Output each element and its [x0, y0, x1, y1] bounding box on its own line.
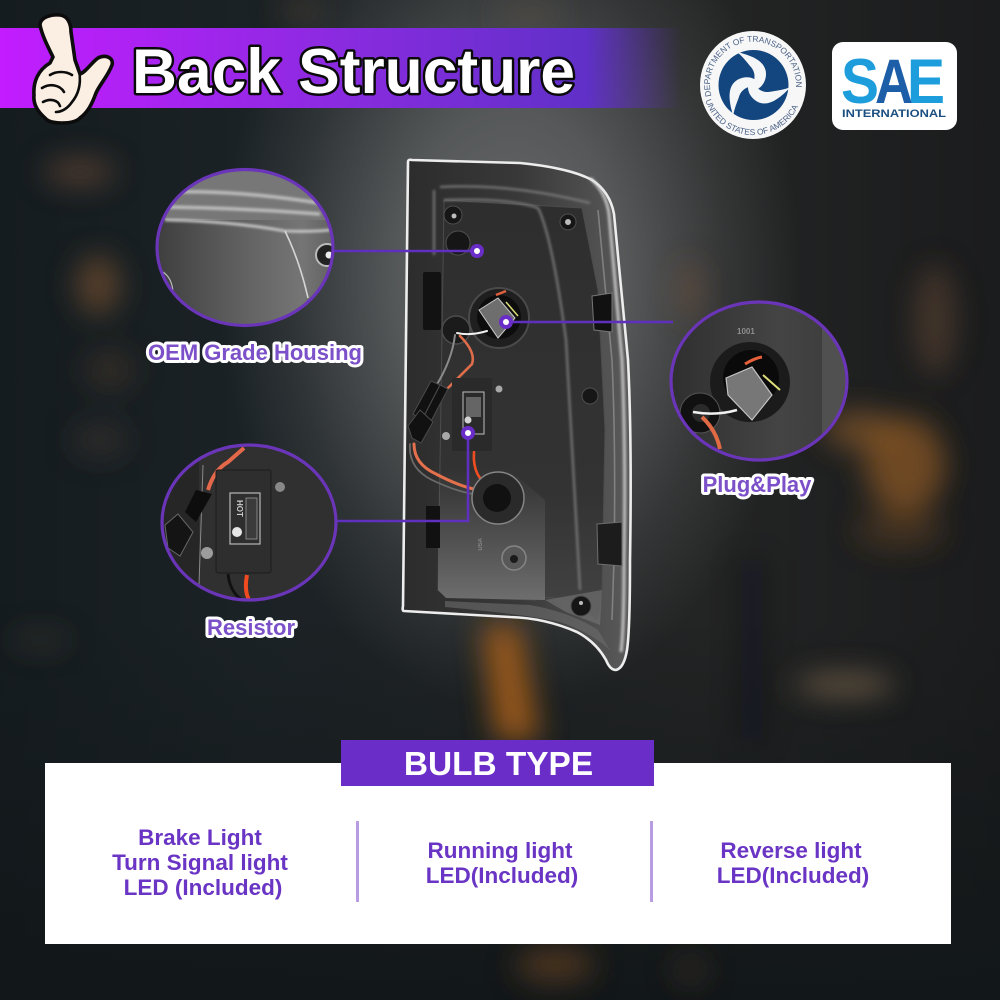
column 3: reverse: Reverse light	[720, 838, 862, 863]
column 1: brake and turn: Turn Signal light	[112, 850, 288, 875]
label: Resistor: Resistor	[207, 615, 295, 640]
divider left	[356, 821, 359, 902]
logo: SAE International: INTERNATIONAL	[842, 108, 946, 120]
logo: US Department of Transportation seal	[700, 31, 806, 139]
column 3: reverse: LED(Included)	[717, 863, 869, 888]
wires lower	[410, 444, 492, 495]
resistor box	[452, 378, 492, 451]
callout: housing detail circle	[150, 165, 340, 330]
lamp ridge highlights	[434, 186, 590, 590]
column 2: running: LED(Included)	[426, 863, 578, 888]
tail light back view	[403, 160, 631, 670]
logo: SAE International: S	[841, 47, 879, 117]
title: Back Structure	[132, 37, 575, 107]
logo: SAE International: A	[875, 47, 913, 117]
lamp inner housing	[438, 200, 605, 620]
bulb socket	[469, 288, 529, 348]
lower left slot	[426, 506, 440, 548]
label: Plug&Play: Plug&Play	[703, 472, 812, 497]
right clip slot top	[592, 293, 612, 332]
lower socket	[472, 472, 524, 524]
screw heads	[452, 214, 583, 605]
bolt corner triangle	[545, 590, 602, 625]
lamp right rim	[590, 178, 625, 652]
heading tab	[341, 740, 654, 786]
connector	[408, 381, 448, 443]
callout: plug detail circle	[665, 295, 855, 465]
column 2: running: Running light	[428, 838, 573, 863]
small wire grommet	[442, 316, 470, 344]
lower round boss	[502, 546, 526, 570]
left clip slot	[423, 272, 441, 330]
panel: bulb type	[45, 740, 951, 944]
label: OEM Grade Housing: OEM Grade Housing	[148, 340, 362, 365]
right clip slot bottom	[597, 522, 622, 566]
leader lines	[333, 251, 673, 521]
divider right	[650, 821, 653, 902]
logo: SAE International: E	[907, 47, 945, 117]
lamp inner bezel	[598, 210, 615, 620]
lower lighter shelf	[438, 470, 545, 600]
lamp outer shell	[403, 160, 631, 670]
banner: header band	[0, 28, 682, 108]
logo: SAE International	[832, 42, 957, 130]
bottom curve band	[445, 601, 610, 650]
column 1: brake and turn: Brake Light	[138, 825, 262, 850]
marker dots	[461, 244, 513, 440]
heading: BULB TYPE: BULB TYPE	[404, 746, 593, 783]
callout: resistor detail circle	[155, 440, 345, 605]
wires upper	[436, 331, 487, 388]
screw bosses	[444, 206, 598, 616]
icon: pointing hand	[34, 15, 112, 123]
moulded lettering: USA	[478, 537, 484, 551]
column 1: brake and turn: LED (Included)	[124, 875, 282, 900]
callout: resistor detail circle: HOT	[235, 500, 244, 517]
callout: plug detail circle: 1001	[737, 327, 755, 336]
panel background	[45, 763, 951, 944]
logo: US Department of Transportation seal: UNITED STATES OF AMERICA	[706, 99, 798, 136]
resistor mounting bolts	[442, 386, 502, 440]
logo: US Department of Transportation seal: DEPARTMENT OF TRANSPORTATION	[704, 36, 802, 97]
